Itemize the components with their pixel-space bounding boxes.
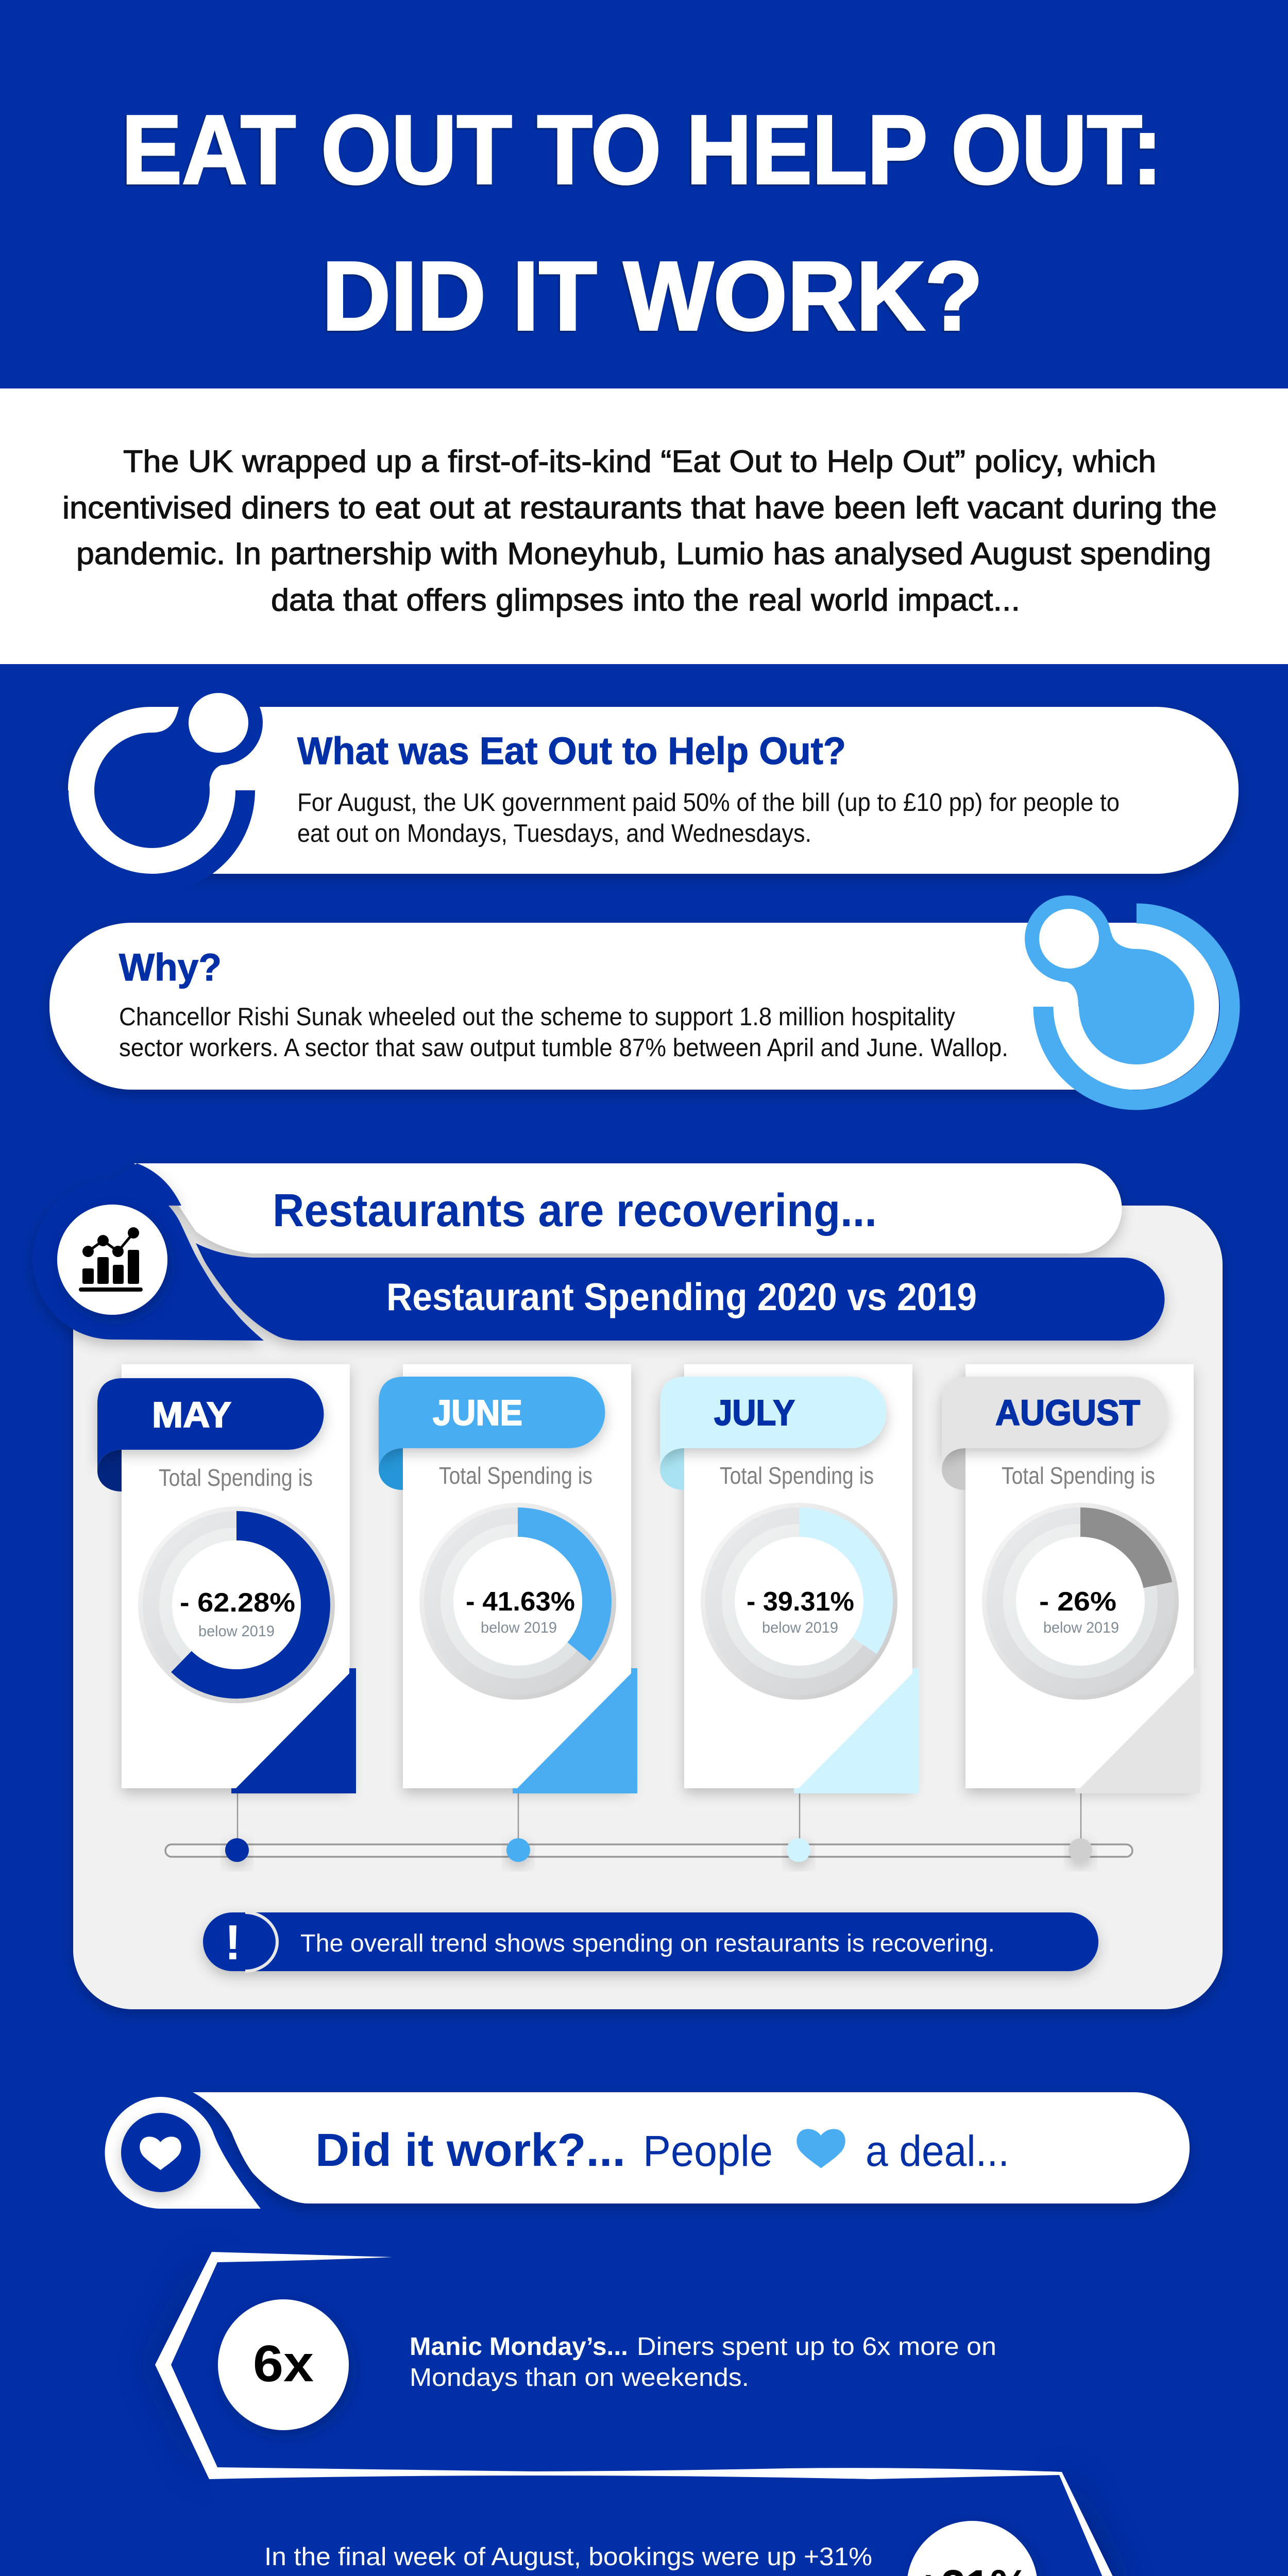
stat: 6x: 6x (253, 2335, 314, 2393)
card: may (97, 1364, 356, 1793)
stat: +31% (907, 2521, 1038, 2576)
arrows: 6x and +31% (155, 2246, 1115, 2576)
title: EAT OUT TO HELP OUT: (122, 95, 1162, 205)
card: june: JUNE (433, 1393, 522, 1433)
card: may: Total Spending is (159, 1464, 313, 1491)
heading: Did it work?... (315, 2125, 625, 2176)
ribbon (942, 1448, 965, 1490)
heading: a deal... (866, 2127, 1009, 2175)
donut: below 2019 (762, 1619, 838, 1636)
ribbon (660, 1448, 684, 1490)
intro text: data that offers glimpses into the real world impact... (271, 583, 1020, 617)
intro text (62, 444, 1217, 617)
donut: - 41.63% (466, 1587, 575, 1617)
corner fold (513, 1668, 637, 1793)
intro text: The UK wrapped up a first-of-its-kind “Eat Out to Help Out” policy, which (123, 444, 1156, 479)
body text: For August, the UK government paid 50% of the bill (up to £10 pp) for people to (297, 789, 1120, 817)
panel: restaurant spending (32, 1163, 1223, 2009)
donut: - 62.28% (180, 1588, 295, 1618)
donut (701, 1503, 897, 1700)
heading ribbon: restaurants are recovering (134, 1163, 1122, 1253)
card: may: MAY (152, 1395, 231, 1435)
card: june (379, 1364, 637, 1793)
donut (138, 1506, 335, 1703)
card: july (660, 1364, 919, 1793)
donut: below 2019 (1043, 1619, 1119, 1636)
donut: below 2019 (481, 1619, 557, 1636)
icon tab: chart (32, 1163, 264, 1341)
icon: exclamation: ! (225, 1915, 241, 1970)
icon: heart (796, 2129, 845, 2168)
text: manic mondays (410, 2333, 996, 2392)
timeline (165, 1838, 1132, 1862)
body text (119, 1003, 1008, 1062)
card: july: Total Spending is (720, 1462, 874, 1489)
heading ribbon: restaurant spending 2020 vs 2019 (196, 1243, 1164, 1341)
heading: People (643, 2127, 773, 2175)
body text (297, 789, 1120, 848)
donut: - 39.31% (747, 1587, 854, 1617)
icon: light blue ring (1025, 895, 1230, 1100)
text: bookings: In the final week of August, bookings were up +31% (264, 2543, 872, 2571)
text: manic mondays: Diners spent up to 6x more on (637, 2333, 996, 2361)
title (122, 95, 1162, 351)
panel: what was eat out to help out (59, 681, 1239, 884)
icon: blue ring (59, 681, 263, 884)
body text: sector workers. A sector that saw output tumble 87% between April and June. Wallop. (119, 1034, 1008, 1062)
card: july: JULY (714, 1393, 795, 1433)
corner fold (1075, 1668, 1200, 1793)
intro band (0, 388, 1288, 664)
body text: Chancellor Rishi Sunak wheeled out the scheme to support 1.8 million hospitality (119, 1003, 955, 1031)
icon: heart ribbon (105, 2097, 261, 2209)
ribbon (97, 1450, 122, 1492)
heading ribbon: restaurant spending 2020 vs 2019: Restaurant Spending 2020 vs 2019 (386, 1275, 977, 1318)
callout: The overall trend shows spending on restaurants is recovering. (300, 1930, 995, 1957)
intro text: pandemic. In partnership with Moneyhub, Lumio has analysed August spending (76, 536, 1211, 571)
intro text: incentivised diners to eat out at restaurants that have been left vacant during the (62, 490, 1217, 525)
text: manic mondays: Manic Monday’s... (410, 2333, 628, 2361)
connector lines (238, 1793, 1081, 1839)
donut: - 26% (1039, 1587, 1116, 1617)
donut: below 2019 (198, 1623, 275, 1640)
panel: did it work (105, 2092, 1190, 2209)
card: august (942, 1364, 1200, 1793)
body text: eat out on Mondays, Tuesdays, and Wednesdays. (297, 820, 811, 848)
donut (419, 1503, 616, 1700)
card: august: Total Spending is (1002, 1462, 1155, 1489)
corner fold (231, 1668, 356, 1793)
heading: Why? (119, 946, 222, 989)
heading (315, 2125, 1009, 2176)
text: manic mondays: Mondays than on weekends. (410, 2364, 749, 2392)
stat: 6x (218, 2299, 349, 2430)
card: august: AUGUST (995, 1393, 1140, 1433)
card: june: Total Spending is (439, 1462, 592, 1489)
heading ribbon: restaurants are recovering: Restaurants are recovering... (273, 1185, 877, 1236)
panel: why (49, 895, 1230, 1100)
heading: What was Eat Out to Help Out? (297, 730, 846, 772)
donut (982, 1503, 1179, 1700)
corner fold (794, 1668, 919, 1793)
title: DID IT WORK? (322, 242, 983, 351)
callout (203, 1912, 1098, 1971)
ribbon (379, 1448, 403, 1490)
